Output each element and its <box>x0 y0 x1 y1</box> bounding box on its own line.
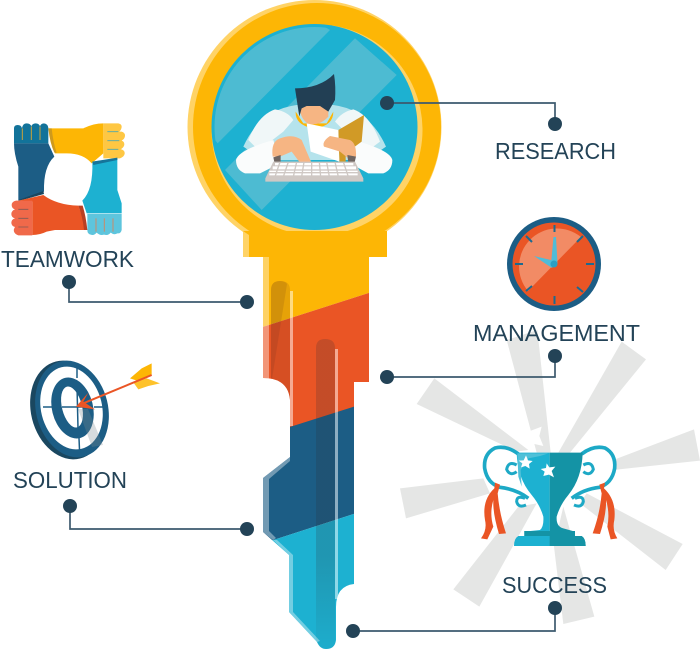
book <box>338 115 364 162</box>
handles <box>485 447 615 506</box>
key <box>180 0 442 649</box>
label: management: MANAGEMENT <box>473 320 640 346</box>
cup highlight <box>517 453 548 487</box>
target board <box>20 353 119 467</box>
connector: teamwork <box>62 275 254 309</box>
shaft left edge highlights <box>263 257 320 642</box>
icon: trophy <box>481 447 617 546</box>
label: teamwork: TEAMWORK <box>1 246 135 272</box>
connector: solution <box>63 499 254 536</box>
cup right half <box>550 453 583 532</box>
connector: research <box>380 96 562 131</box>
cyan hand <box>82 158 122 235</box>
face <box>299 103 328 124</box>
cup left half <box>517 453 550 532</box>
groove one <box>271 281 290 400</box>
key neck <box>243 231 387 257</box>
arms <box>248 109 293 147</box>
hair <box>295 74 335 117</box>
collar <box>296 112 333 128</box>
blue hand <box>14 123 54 201</box>
label: research: RESEARCH <box>495 138 616 164</box>
orange hand <box>11 195 87 235</box>
arrow <box>76 363 160 409</box>
label: solution: SOLUTION <box>13 467 127 493</box>
yellow hand <box>48 123 125 163</box>
groove highlights <box>290 291 338 599</box>
keyboard <box>265 162 363 182</box>
clock hands <box>534 237 558 268</box>
key shaft segments <box>263 257 369 649</box>
icon: teamwork hands <box>11 123 125 235</box>
trophy base <box>514 531 586 546</box>
ribbons <box>481 483 617 539</box>
hands <box>272 136 312 165</box>
person at keyboard <box>236 74 392 182</box>
icon: clock <box>507 217 601 311</box>
paper <box>307 123 339 162</box>
connector: success <box>346 601 562 638</box>
stars <box>519 455 555 477</box>
clock ticks <box>515 225 594 304</box>
key glass <box>212 24 418 230</box>
rays behind trophy <box>400 330 700 624</box>
key head ring <box>188 0 442 254</box>
icon: target with arrow <box>20 353 160 467</box>
connector: management <box>380 349 562 384</box>
label: success: SUCCESS <box>502 572 607 598</box>
groove two <box>316 339 335 649</box>
